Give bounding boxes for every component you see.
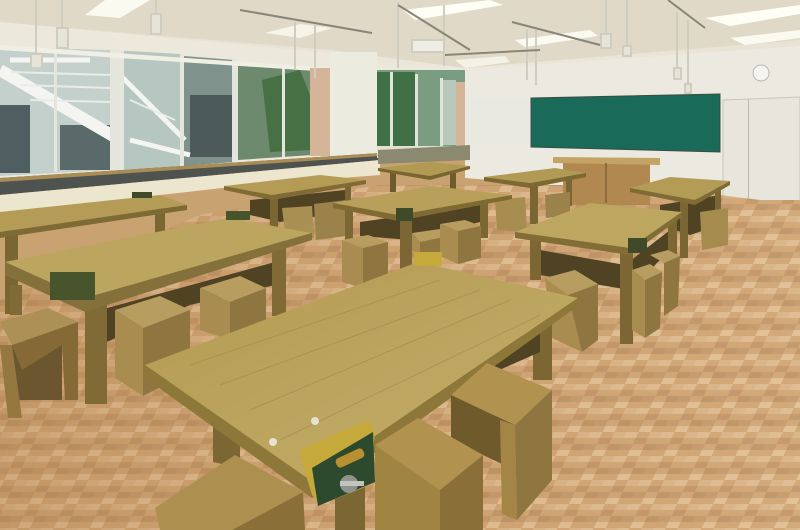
table: second row left [5,211,312,404]
table: centre [333,186,512,272]
floor [0,185,800,530]
stools: front table [155,363,552,530]
sill and radiator band [0,153,380,195]
table: far right [630,177,730,258]
front table [145,252,578,530]
hanging ceiling lamps [31,0,691,93]
back windows [377,70,466,158]
stools: right centre table [545,250,680,352]
chalkboard [531,94,720,152]
window wall [0,22,380,225]
stools: centre table [342,220,481,288]
table: right centre [515,203,682,344]
door [723,97,800,205]
pillar [330,52,377,158]
table: right rear [484,168,586,232]
ceiling [0,0,800,70]
window frames [54,48,285,172]
bench vice [300,420,375,506]
stairs outside the window [0,60,190,155]
front wall [465,46,800,205]
stools: second row table [0,276,266,418]
table: rear left [224,175,366,240]
curtain [310,68,330,156]
table: far left [0,192,187,314]
teacher's desk [553,157,660,205]
ceiling rails [240,0,705,55]
back table [378,145,470,192]
